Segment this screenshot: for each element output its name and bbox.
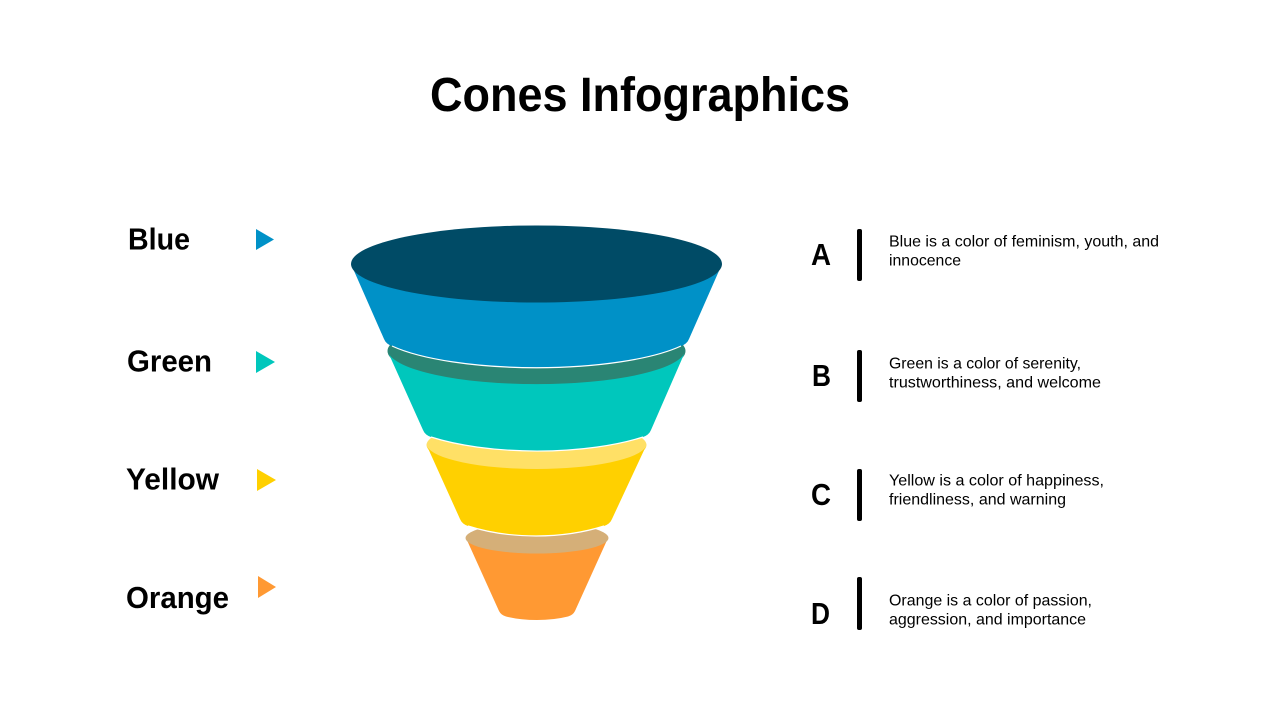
item A: innocence [889,252,961,270]
right descriptions [811,229,1159,631]
arrow: green [256,351,275,373]
item A [811,229,1159,281]
funnel of cones [351,226,722,620]
arrow: yellow [257,469,276,491]
item B: B [812,358,831,393]
arrow: orange [258,576,276,598]
item B: Green is a color of serenity, [889,356,1081,372]
item B [812,350,1101,402]
left labels [126,222,276,615]
item C [811,469,1104,521]
item C: Yellow is a color of happiness, [889,472,1104,490]
label: yellow: Yellow [126,462,220,496]
arrow: blue [256,229,274,250]
item C: C [811,477,831,512]
item A: Blue is a color of feminism, youth, and [889,234,1159,250]
item C: friendliness, and warning [889,492,1066,508]
item D: Orange is a color of passion, [889,592,1092,610]
cone: green [388,318,686,451]
cone: blue [351,226,722,368]
label: green: Green [127,344,212,378]
item D [811,577,1092,631]
cone: yellow [426,420,646,536]
label: blue: Blue [128,222,190,256]
label: orange: Orange [126,580,229,615]
item B: trustworthiness, and welcome [889,374,1101,392]
item D: aggression, and importance [889,612,1086,628]
cone: orange [466,522,608,620]
title: Cones Infographics [430,69,850,122]
item A: A [811,237,831,272]
item D: D [811,596,830,631]
